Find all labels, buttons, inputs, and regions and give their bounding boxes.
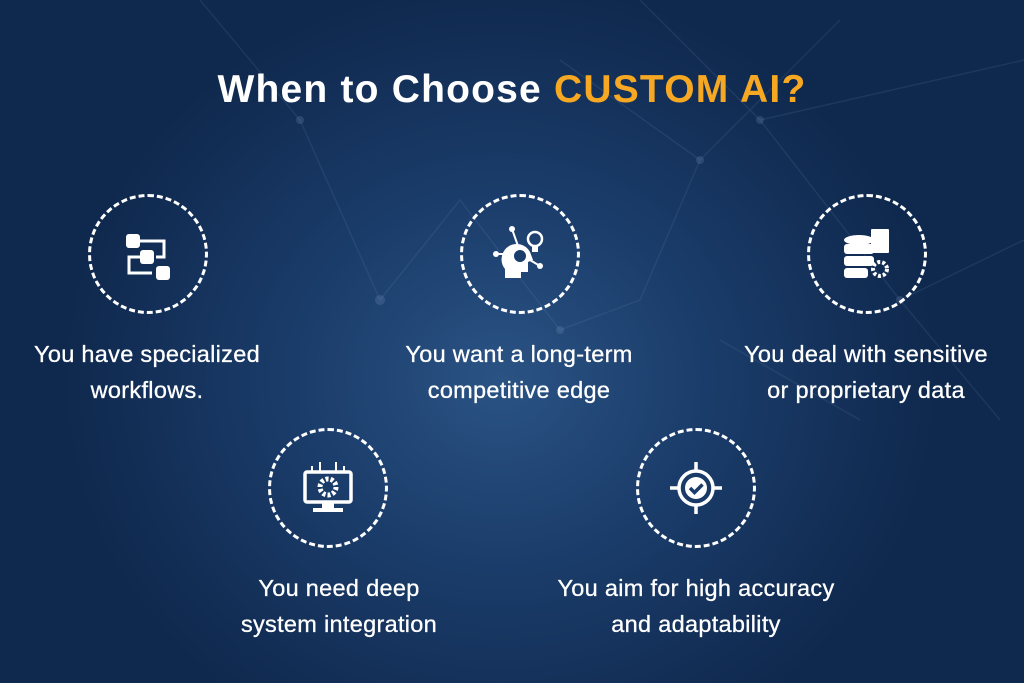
text: accuracy [557, 575, 835, 638]
text: sensitive data: or proprietary data [767, 377, 965, 403]
text: workflows: You have specialized [34, 341, 260, 367]
text: competitive edge [405, 341, 633, 404]
icon: target check [636, 428, 756, 548]
text: integration: system integration [241, 611, 437, 637]
text: accuracy: You aim for high accuracy [557, 575, 835, 601]
text: sensitive data: You deal with sensitive [744, 341, 988, 367]
text: accuracy: and adaptability [611, 611, 781, 637]
icon: workflow [88, 194, 208, 314]
text: competitive edge: competitive edge [428, 377, 610, 403]
text: integration [241, 575, 437, 638]
icon: system integration [268, 428, 388, 548]
icon: database [807, 194, 927, 314]
text: workflows: workflows. [91, 377, 203, 403]
title: When to Choose CUSTOM AI? [218, 68, 806, 111]
icon: mind bulb [460, 194, 580, 314]
text: integration: You need deep [258, 575, 420, 601]
text: workflows [34, 341, 260, 403]
text: competitive edge: You want a long-term [405, 341, 633, 367]
text: sensitive data [744, 341, 988, 404]
